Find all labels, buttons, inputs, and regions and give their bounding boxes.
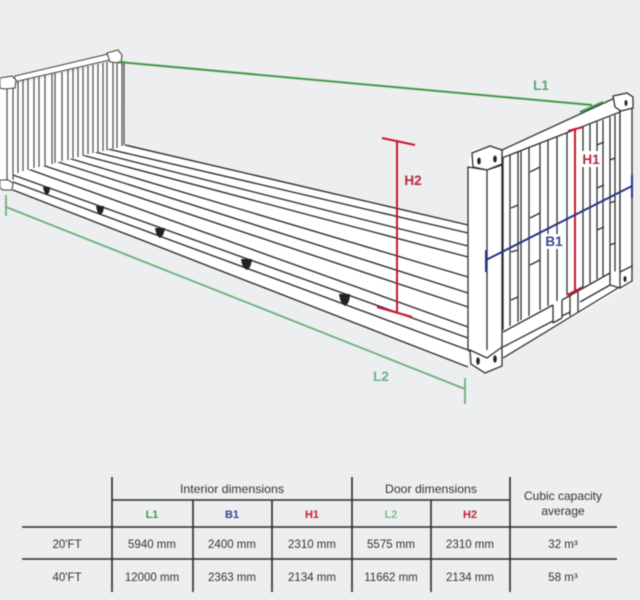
header: interior dimensions: Interior dimensions	[180, 482, 284, 496]
row: 40'FT: 58 m³	[548, 572, 578, 584]
column labels: H1	[305, 509, 319, 521]
column labels	[146, 509, 477, 521]
column labels: L2	[385, 509, 397, 521]
row: 40'FT	[52, 572, 578, 584]
dimension B1	[486, 175, 632, 272]
header: door dimensions: Door dimensions	[385, 482, 477, 496]
container floor	[13, 145, 468, 368]
dimension L2: L2	[373, 369, 389, 384]
column labels: L1	[146, 509, 158, 521]
row: 40'FT: 2363 mm	[208, 572, 256, 584]
dimension H1	[567, 127, 600, 295]
dimension H2	[377, 138, 422, 317]
bottom rail	[503, 270, 630, 358]
table grid	[22, 477, 617, 592]
row: 40'FT: 2134 mm	[288, 572, 336, 584]
dimension B1: B1	[545, 234, 563, 249]
dimensions table: average	[541, 504, 585, 518]
row: 20'FT: 2310 mm	[288, 539, 336, 551]
top rail	[502, 97, 620, 158]
dimension L1: L1	[533, 78, 549, 93]
header: cubic capacity: Cubic capacity	[524, 489, 602, 503]
row: 20'FT: 5575 mm	[367, 539, 415, 551]
row: 20'FT	[52, 539, 578, 551]
dimension L2	[6, 195, 465, 404]
row: 40'FT: 12000 mm	[125, 572, 179, 584]
dimension H2: H2	[404, 173, 422, 188]
left end door	[0, 50, 124, 190]
row: 20'FT: 2310 mm	[446, 539, 494, 551]
dimension L1	[118, 62, 603, 112]
right end door	[468, 93, 633, 373]
door slats	[503, 113, 620, 330]
column labels: H2	[463, 509, 477, 521]
row: 40'FT: 40'FT	[52, 572, 82, 584]
left door corner posts	[0, 50, 122, 190]
row: 20'FT: 5940 mm	[128, 539, 176, 551]
corner casting holes	[476, 100, 628, 365]
dimensions table	[22, 477, 617, 592]
row: 20'FT: 2400 mm	[208, 539, 256, 551]
row: 20'FT: 20'FT	[52, 539, 82, 551]
dimension H1: H1	[582, 152, 600, 167]
right corner posts	[468, 165, 502, 365]
wheel notches on floor edge	[43, 187, 350, 306]
row: 40'FT: 2134 mm	[446, 572, 494, 584]
column labels: B1	[225, 509, 239, 521]
row: 40'FT: 11662 mm	[364, 572, 418, 584]
row: 20'FT: 32 m³	[548, 539, 578, 551]
